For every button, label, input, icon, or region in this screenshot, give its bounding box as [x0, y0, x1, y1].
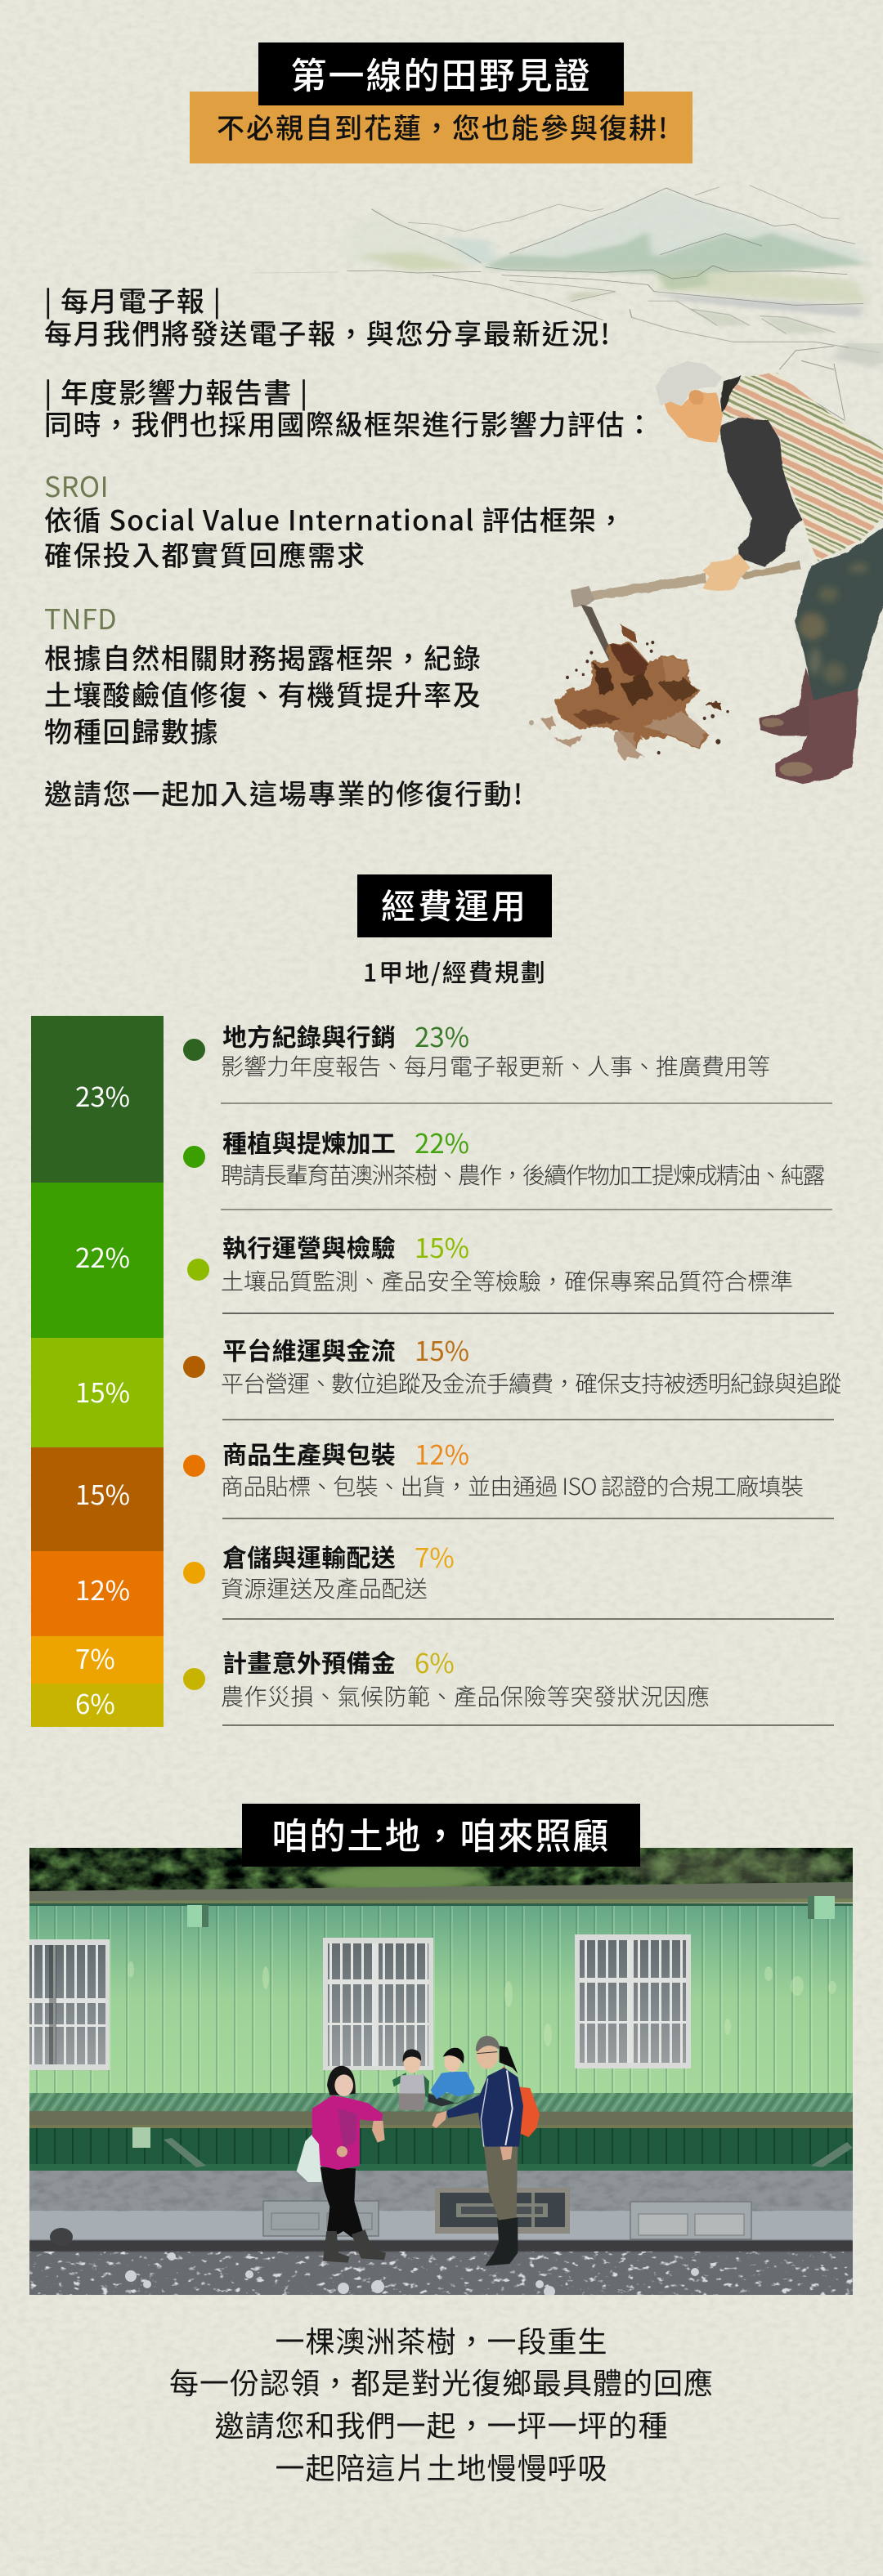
item description: 商品貼標、包裝、出貨，並由通過 ISO 認證的合規工廠填裝 [221, 1469, 804, 1502]
bar segment 6%: 6% [75, 1683, 115, 1722]
orange subtitle banner [190, 92, 693, 163]
illustration: watercolor mountains and river [253, 185, 882, 369]
item description: 聘請長輩育苗澳洲茶樹、農作，後續作物加工提煉成精油、純露 [221, 1158, 824, 1191]
text block: 每月電子報 [44, 280, 612, 352]
windows [29, 1934, 691, 2070]
front boot [775, 689, 858, 784]
awning and beam [29, 2093, 853, 2130]
item description: 農作災損、氣候防範、產品保險等突發狀況因應 [221, 1679, 710, 1712]
legend dot [183, 1356, 205, 1378]
bar segment 22%: 22% [75, 1237, 130, 1276]
item description: 土壤品質監測、產品安全等檢驗，確保專案品質符合標準 [221, 1264, 793, 1297]
bar segment 15%: 15% [75, 1474, 130, 1513]
item title: 地方紀錄與行銷 [222, 1017, 396, 1053]
legend dot [183, 1038, 205, 1061]
item title: 倉儲與運輸配送 [222, 1538, 396, 1574]
text block: SROI [44, 465, 625, 574]
hand [702, 553, 751, 592]
photo: family in front of green building [29, 1848, 853, 2295]
woman [297, 2066, 386, 2263]
heading: | 每月電子報 | [44, 280, 222, 320]
SROI description: 依循 Social Value International 評估框架， [44, 499, 625, 539]
item description: 影響力年度報告、每月電子報更新、人事、推廣費用等 [221, 1049, 770, 1082]
sleeve [719, 418, 803, 566]
legend dot [183, 1561, 205, 1584]
face [661, 391, 723, 443]
bar segment 7% [31, 1636, 164, 1684]
kid right [428, 2048, 475, 2106]
building [29, 1882, 853, 2094]
item percent: 6% [415, 1642, 455, 1681]
budget item: 平台維運與金流 [183, 1330, 840, 1399]
closing text [169, 2319, 714, 2488]
budget item: 倉儲與運輸配送 [183, 1536, 455, 1604]
soil pile [542, 625, 719, 761]
item title: 種植與提煉加工 [222, 1124, 396, 1160]
subtitle text: 不必親自到花蓮，您也能參與復耕! [217, 106, 670, 146]
text block: TNFD [44, 597, 482, 750]
item title: 商品生產與包裝 [222, 1435, 396, 1471]
trees [29, 1848, 853, 1893]
back leg boot [759, 667, 815, 736]
item percent: 15% [415, 1330, 469, 1369]
heading: 咱的土地，咱來照顧: 咱的土地，咱來照顧 [271, 1807, 610, 1859]
closing line 1: 一棵澳洲茶樹，一段重生 [275, 2319, 608, 2361]
bar segment 22% [31, 1183, 164, 1338]
TNFD description [44, 637, 482, 750]
body: 每月我們將發送電子報，與您分享最新近況! [44, 312, 612, 352]
item title: 執行運營與檢驗 [222, 1228, 396, 1264]
closing line 4: 一起陪這片土地慢慢呼吸 [275, 2445, 608, 2488]
item percent: 12% [415, 1433, 469, 1473]
heading: 經費運用: 經費運用 [381, 879, 528, 929]
illustration: farmer hoeing the soil [529, 343, 883, 785]
hoe head [571, 585, 594, 607]
title: 第一線的田野見證: 第一線的田野見證 [291, 47, 592, 99]
subheading: 1甲地/經費規劃: 1甲地/經費規劃 [363, 953, 547, 989]
bar segment 23%: 23% [75, 1076, 130, 1115]
collar [721, 375, 742, 414]
legend dot [183, 1455, 205, 1476]
vest [722, 373, 883, 561]
heading: | 年度影響力報告書 | [44, 371, 309, 411]
bar segment 15%: 15% [75, 1371, 130, 1411]
gravel ground [29, 2228, 853, 2297]
budget item: 種植與提煉加工 [183, 1122, 824, 1191]
budget item: 計畫意外預備金 [183, 1642, 710, 1712]
handle [591, 573, 706, 601]
bar segment 12% [31, 1551, 164, 1636]
bar segment 12%: 12% [75, 1569, 130, 1608]
closing line 2: 每一份認領，都是對光復鄉最具體的回應 [169, 2360, 714, 2403]
budget item: 執行運營與檢驗 [187, 1227, 793, 1297]
call to action text: 邀請您一起加入這場專業的修復行動! [44, 772, 524, 812]
trousers [795, 527, 883, 701]
heading: 經費運用 [357, 874, 552, 937]
bar segment 15% [31, 1338, 164, 1447]
bar segment 15% [31, 1447, 164, 1551]
item description: 平台營運、數位追蹤及金流手續費，確保支持被透明紀錄與追蹤 [221, 1366, 840, 1399]
concrete foundation [29, 2171, 853, 2242]
hair [656, 360, 722, 406]
TNFD description: 物種回歸數據 [44, 710, 219, 750]
stacked bar chart [31, 1016, 164, 1727]
man [432, 2036, 540, 2266]
label TNFD: TNFD [44, 597, 117, 637]
kid left [392, 2049, 429, 2110]
family group [297, 2036, 540, 2266]
item percent: 22% [415, 1122, 469, 1161]
body: 同時，我們也採用國際級框架進行影響力評估： [44, 403, 655, 443]
legend dot [183, 1667, 205, 1690]
closing line 3: 邀請您和我們一起，一坪一坪的種 [214, 2403, 669, 2445]
item percent: 7% [415, 1536, 455, 1576]
SROI description second line: 確保投入都實質回應需求 [44, 534, 366, 574]
budget item: 地方紀錄與行銷 [183, 1016, 770, 1082]
item title: 計畫意外預備金 [222, 1644, 396, 1679]
budget item: 商品生產與包裝 [183, 1433, 804, 1502]
item title: 平台維運與金流 [222, 1331, 396, 1367]
legend dot [183, 1146, 205, 1167]
label SROI: SROI [44, 465, 109, 505]
text block: 年度影響力報告書 [44, 371, 655, 443]
title: 第一線的田野見證 [258, 42, 624, 105]
bar segment 6% [31, 1684, 164, 1727]
legend dot [187, 1259, 209, 1281]
bar segment 23% [31, 1016, 164, 1183]
cloth on back [779, 347, 845, 421]
item percent: 15% [415, 1227, 469, 1266]
bar segment 7%: 7% [75, 1638, 115, 1677]
item percent: 23% [415, 1016, 469, 1055]
TNFD description: 土壤酸鹼值修復、有機質提升率及 [44, 673, 482, 713]
lower wall [29, 2127, 853, 2171]
TNFD description: 根據自然相關財務揭露框架，紀錄 [44, 637, 482, 677]
item description: 資源運送及產品配送 [221, 1572, 428, 1604]
